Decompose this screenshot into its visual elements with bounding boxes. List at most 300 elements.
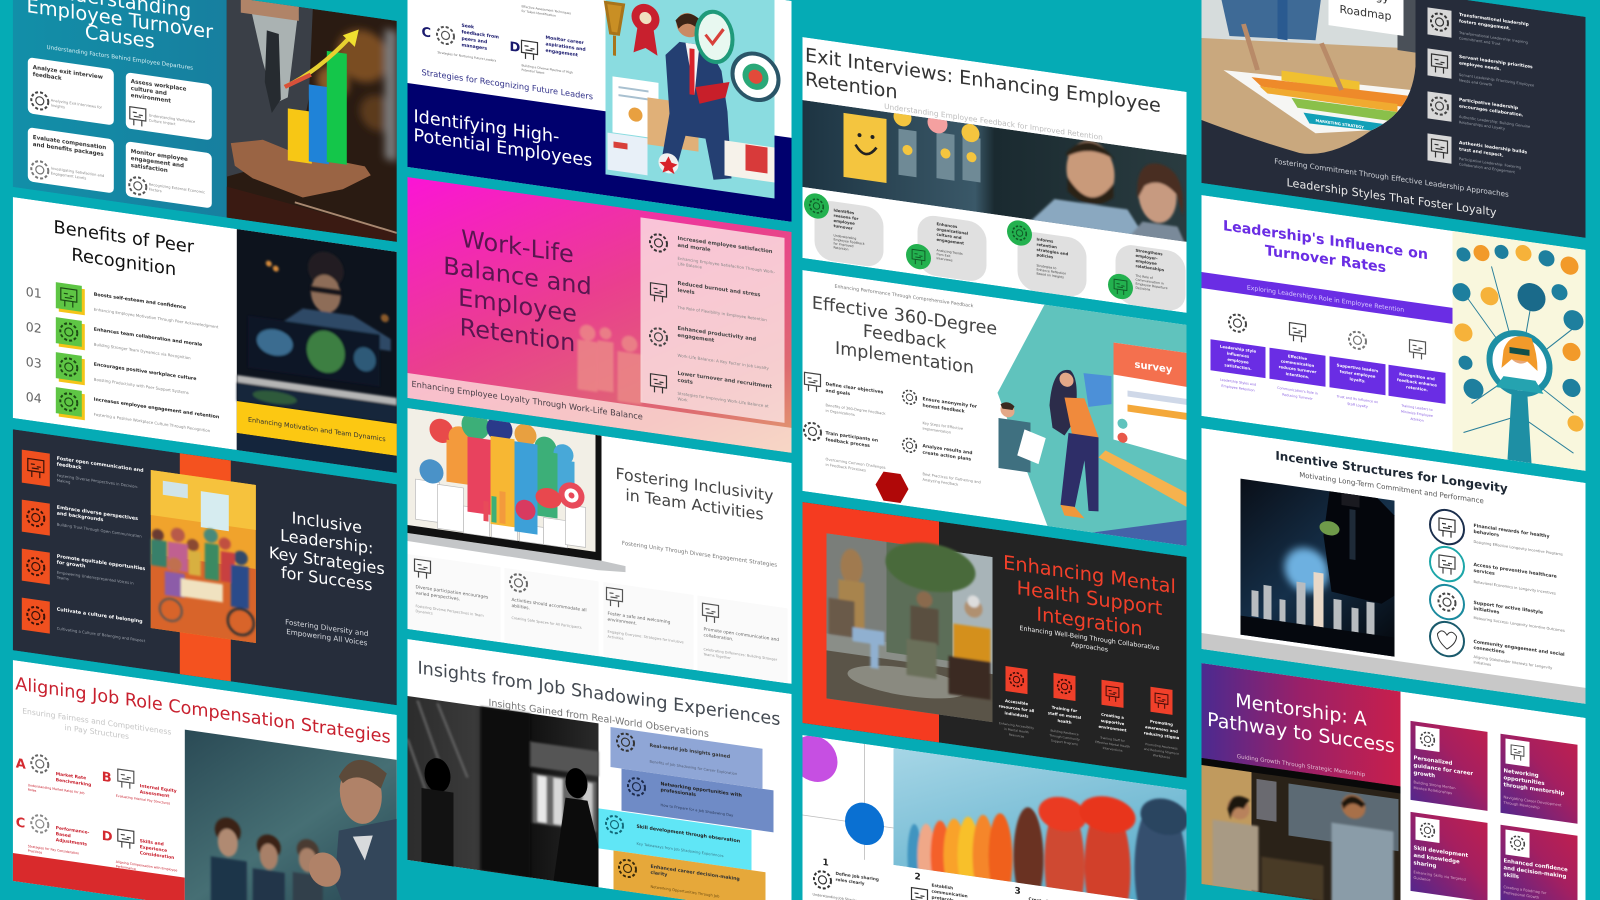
list item: analyze results: create action plans (922, 450, 971, 463)
slide: aligning job role compensation (13, 660, 397, 900)
slide subtitle: Motivating Long-Term Commitment and Performance (1299, 470, 1484, 505)
blob card 1: Understanding (833, 233, 856, 241)
list item 02: 02 (26, 319, 42, 336)
column 1: Dynamics (416, 609, 433, 616)
step 2: Establish (932, 882, 953, 891)
red hexagon (876, 470, 908, 504)
column 4: Celebrating Differences: Building Stronger (704, 647, 778, 662)
column 3: Staff Loyalty (1347, 402, 1368, 409)
slide title: Enhancing Mental (1003, 551, 1176, 598)
item C: Based (56, 831, 71, 839)
item D: Skills and (140, 838, 164, 848)
slide: incentive structures for longevity (1202, 428, 1586, 704)
item D: Experience (140, 844, 167, 854)
item B: Evaluating Internal Pay Structures (116, 794, 170, 806)
list item 04: 04 (26, 389, 42, 406)
list item: diverse perspectives (22, 500, 142, 538)
column 3 (604, 582, 694, 670)
column 1: satisfaction. (1224, 362, 1252, 371)
list item: equitable opportunities: Empowering Underrepresented Voices in (57, 570, 134, 586)
column 2: Communication's Role in (1277, 386, 1318, 396)
slide title: Insights from Job Shadowing Experiences (418, 659, 780, 730)
slide title: Turnover Rates (1265, 243, 1386, 276)
step 2 (912, 872, 968, 900)
list item: financial rewards: Designing Effective Longevity Incentive Programs (1474, 540, 1563, 557)
card: personalized guidance: Personalized (1414, 755, 1453, 767)
column 1: in Mental Health (1004, 727, 1029, 734)
slide: leadership styles that foster loyalty (1202, 0, 1586, 238)
card: evaluate compensation: Engagement Levels (51, 171, 86, 181)
column 2: health (1058, 718, 1072, 725)
list item: diverse perspectives: Embrace diverse perspectives (57, 505, 138, 522)
list item 3: engagement (678, 333, 715, 344)
slide: identifying high-potential employees (408, 0, 792, 222)
column 4: and Reducing Stigma in (1144, 747, 1179, 756)
list item: preventive healthcare: Behavioral Economics in Longevity Incentives (1474, 580, 1556, 596)
card: assess workplace culture (126, 72, 212, 140)
list item: train participants (804, 422, 886, 475)
column 4: Minimize Employee (1401, 410, 1433, 418)
roadmap label: Roadmap (1339, 3, 1392, 23)
blob card 4: employer- (1136, 253, 1158, 261)
slide title: Mentorship: A (1235, 689, 1367, 731)
card: networking opportunities: Navigating Career Development (1504, 795, 1562, 808)
column 1: resources for all (999, 703, 1035, 713)
blob card 4: Strengthens (1136, 248, 1163, 257)
column 3: Interventions (1103, 746, 1123, 753)
list item: authentic: trust and respect. (1459, 146, 1504, 159)
column 3: supportive (1101, 718, 1125, 726)
list item: culture of belonging: Cultivating a Culture of Belonging and Respect (57, 626, 146, 643)
card: assess workplace culture: Assess workplace (131, 79, 187, 93)
blob card 2 (906, 212, 986, 283)
list item: community engagement: Community engagement and social (1474, 639, 1565, 658)
list item: servant: Servant leadership prioritizes (1459, 54, 1533, 70)
card: personalized guidance: Mentee Relationships (1414, 786, 1452, 795)
item C (422, 24, 499, 62)
item D: D (102, 829, 113, 845)
column 1: Accessible (1005, 698, 1028, 706)
slide title: in Team Activities (625, 485, 764, 524)
item D: engagement (546, 48, 579, 58)
list item: equitable opportunities (22, 548, 145, 585)
column 4: Attrition (1410, 417, 1424, 423)
card: evaluate compensation: and benefits packages (33, 142, 104, 158)
bar 4: career clarity (614, 850, 766, 900)
card: personalized guidance: guidance for career (1414, 763, 1473, 777)
list item 01 (26, 282, 218, 328)
slide: exit interviews (802, 37, 1186, 313)
item C: Practices (28, 849, 43, 855)
column 1: Diverse participation encourages (416, 584, 489, 601)
card: enhanced confidence: skills (1504, 872, 1519, 880)
column 4: Training Leaders to (1400, 403, 1433, 412)
item C: managers (461, 42, 487, 52)
column 3 (1095, 679, 1130, 754)
column 4: Workplaces (1153, 753, 1171, 760)
list item 1: and morale (678, 243, 711, 253)
card: networking opportunities: opportunities (1504, 775, 1545, 787)
bar 2: networking: professionals (660, 787, 696, 798)
list item 4: Work (678, 396, 688, 403)
item A (16, 754, 91, 794)
photo: smiley boards and smiling colleagues (802, 94, 1186, 247)
blob card 4: The Role of (1135, 273, 1154, 280)
card: assess workplace culture: culture and (131, 86, 167, 97)
list item: authentic: Authentic leadership builds (1459, 140, 1528, 156)
column 2: Activities should accommodate all (512, 597, 587, 614)
list item: community engagement: Aligning Stakeholder Interests for Longevity (1474, 655, 1553, 670)
list item: train participants: feedback process (825, 437, 870, 449)
column 3: environment (1099, 724, 1127, 733)
list item 03 (26, 352, 196, 394)
column 1: Leadership style (1220, 344, 1256, 354)
list item: participative: encourages collaboration. (1459, 103, 1524, 119)
list item: anonymity: Key Steps for Effective (922, 421, 964, 431)
list item: preventive healthcare: services (1474, 568, 1495, 577)
blob card 4: Employee Departure (1136, 282, 1168, 290)
item C: Performance- (56, 825, 89, 836)
column 3: foster employee (1340, 369, 1376, 379)
list item: active lifestyle (1430, 583, 1565, 636)
column 1: employee (1227, 357, 1249, 365)
list item 3: Enhanced productivity and (678, 326, 756, 343)
list item: anonymity: honest feedback (922, 403, 966, 415)
list item: analyze results: Analyze results and (922, 443, 972, 456)
column 2 (504, 568, 598, 656)
list item: preventive healthcare: Access to preventive healthcare (1474, 562, 1557, 580)
column 2 (1048, 672, 1082, 747)
blob card 3: Based on Insights (1036, 271, 1064, 279)
bar 2: networking (622, 769, 774, 832)
slide subtitle: Understanding Factors Behind Employee Departures (47, 45, 193, 72)
step 3 (1010, 886, 1089, 900)
slide title: Feedback (863, 322, 947, 354)
bar 3: skill development: Key Takeaways from Job Shadowing Experiences (636, 842, 724, 858)
list item: diverse perspectives: Building Trust Through Open Communication (57, 522, 142, 539)
card: enhanced confidence: Professional Growth (1504, 891, 1539, 900)
blob card 1: reasons for (833, 213, 858, 221)
column 1 (1210, 311, 1266, 394)
list item: open communication: Fostering Diverse Perspectives in Decision- (57, 473, 139, 489)
step 3: 3 (1014, 886, 1021, 897)
column 1: Resources (1009, 733, 1025, 739)
slide subtitle: Fostering Unity Through Diverse Engagement Strategies (622, 541, 777, 569)
card: personalized guidance: Building Strong Mentor- (1414, 780, 1457, 790)
blob card 3: retention (1036, 242, 1057, 250)
column 4: feedback enhance (1397, 377, 1437, 388)
list item 01: Enhancing Employee Motivation Through Peer Acknowledgment (94, 307, 219, 329)
list item: participative: Authentic Leadership: Building Genuine (1459, 115, 1531, 129)
purple circle (792, 732, 838, 785)
blob card 2: from Exit (936, 252, 951, 258)
subtitle: Understanding Employee Feedback for Improved Retention (884, 102, 1103, 142)
subtitle band: Enhancing Employee Loyalty Through Work-Life Balance (412, 379, 643, 422)
list item: train participants: in Feedback Processes (825, 463, 866, 473)
list item 3: Work-Life Balance: A Key Factor in Job Loyalty (678, 353, 770, 371)
slide title: Implementation (835, 339, 974, 378)
slide title: Retention (460, 313, 575, 357)
list item: analyze results: Best Practices for Gathering and (922, 472, 981, 484)
card: monitor employee engagement: Recognizing External Economic (149, 182, 205, 194)
list item: authentic (1428, 133, 1528, 176)
column 3: Supportive leaders (1337, 362, 1379, 373)
slide: leadership's influence on turnover (1202, 195, 1586, 471)
item C: feedback from (461, 29, 499, 41)
column 2: Effective (1288, 353, 1307, 361)
subtitle band (408, 373, 792, 453)
slide title: Effective 360-Degree (812, 293, 997, 340)
list item: authentic: Collaboration and Engagement (1459, 162, 1515, 174)
slide title: Leadership: (280, 526, 373, 558)
item D: Consideration (140, 850, 174, 861)
list item: active lifestyle: Support for active lifestyle (1474, 600, 1543, 616)
column 4: Promoting (1150, 719, 1173, 727)
column 2: Training for (1052, 705, 1077, 713)
card: skill development: Enhancing Skills via Targeted (1414, 870, 1466, 882)
step 1: Define job sharing (836, 871, 879, 882)
column 4: reducing stigma (1144, 730, 1180, 740)
card: enhanced confidence: Creating a Roadmap for (1504, 885, 1547, 895)
slide title: Causes (85, 20, 155, 53)
list item 2: levels (678, 288, 695, 296)
item D: Monitor career (546, 35, 585, 46)
column 4 (698, 595, 788, 683)
slide subtitle: in Pay Structures (65, 723, 129, 741)
item D: Aligning Compensation with Employee (116, 860, 177, 873)
illustration: man reading with clock (606, 0, 778, 199)
blob card 3: Informs (1036, 236, 1054, 244)
bar 4: career clarity: Networking Opportunities Through Job (650, 885, 720, 899)
card: skill development: Guidance (1414, 876, 1431, 882)
card: analyze exit interview: Analyze exit interview (33, 65, 103, 81)
slide title: Exit Interviews: Enhancing Employee (805, 43, 1161, 117)
list item: transformational (1428, 7, 1529, 50)
slide title: Benefits of Peer (54, 217, 195, 258)
card: personalized guidance: growth (1414, 770, 1435, 779)
column 1: individuals (1005, 710, 1029, 719)
photo: hand holding bar chart (227, 0, 397, 242)
item B supporting text: Effective Assessment Techniques (522, 4, 571, 15)
list item: anonymity (903, 390, 978, 439)
item C: C (422, 25, 431, 41)
list item 03: 03 (26, 354, 42, 371)
slide: fostering inclusivity (408, 402, 792, 684)
list item: active lifestyle: Measuring Success: Longevity Incentive Outcomes (1474, 616, 1565, 633)
step 2: 2 (914, 872, 921, 883)
illustration: woman with survey board: survey (1134, 360, 1173, 376)
column 4: Recognition and (1399, 371, 1435, 381)
list item 1: Life Balance (678, 261, 702, 270)
item A: Roles (28, 788, 37, 793)
list item: transformational: Commitment and Trust (1459, 36, 1501, 46)
column 2: communication (1281, 358, 1314, 368)
list item: participative (1428, 91, 1531, 135)
list item: servant: Servant Leadership: Prioritizing Employee (1459, 73, 1535, 88)
card: analyze exit interview: Insights (51, 103, 65, 109)
bar 4: career clarity: clarity (650, 870, 667, 878)
blob card 1: turnover (833, 223, 853, 231)
list item 1: Enhancing Employee Satisfaction Through Work- (678, 256, 775, 275)
slide subtitle: Guiding Growth Through Strategic Mentorship (1237, 754, 1366, 778)
slide title: Leadership Styles That Foster Loyalty (1287, 176, 1497, 219)
column 1: Fostering Diverse Perspectives in Team (416, 604, 484, 618)
list item 04 (26, 387, 219, 432)
bar 2: networking: Networking opportunities with (660, 781, 742, 799)
list item 02 (26, 317, 202, 360)
list item 01: Boosts self-esteem and confidence (94, 292, 186, 311)
list item 04: Fostering a Positive Workplace Culture Through Recognition (94, 412, 211, 433)
purple subtitle band (1202, 272, 1452, 324)
list item: community engagement (1430, 620, 1565, 677)
column 2: intentions. (1286, 371, 1310, 379)
list item: train participants: Train participants on (825, 430, 878, 444)
card: analyze exit interview: Analyzing Exit Interviews for (51, 98, 103, 110)
item B: B (102, 770, 112, 786)
blob card 4: employee (1136, 258, 1157, 266)
column 1 (408, 554, 500, 642)
slide: insights from job shadowing (408, 639, 792, 900)
slide: understanding employee turnover causes (13, 0, 397, 242)
list item: equitable opportunities: for growth (57, 560, 86, 570)
column 2: staff on mental (1048, 710, 1082, 720)
list item: financial rewards (1430, 508, 1563, 561)
list item: community engagement: connections (1474, 645, 1505, 655)
blob card 1: Employee Feedback (833, 237, 865, 246)
list item: open communication: Making (57, 478, 71, 485)
list item: equitable opportunities: Promote equitable opportunities (57, 554, 145, 572)
column 3: environment. (608, 617, 637, 627)
card: networking opportunities: Through Mentorship (1503, 801, 1540, 810)
card: assess workplace culture: environment (131, 93, 171, 105)
item A: Benchmarking (56, 777, 91, 788)
bar 1: real-world insights (610, 727, 762, 789)
card: networking opportunities: through mentorship (1504, 782, 1564, 797)
list item: diverse perspectives: and backgrounds (57, 511, 104, 523)
card: networking opportunities: Networking (1504, 768, 1539, 779)
item D (102, 828, 178, 872)
list item: participative: Relationships and Loyalty (1459, 120, 1506, 131)
list item 03: Encourages positive workplace culture (94, 362, 196, 382)
slide: work-life balance (408, 177, 792, 453)
list item: anonymity: Ensure anonymity for (922, 396, 978, 410)
list item 03: Boosting Productivity with Peer Support Systems (94, 377, 189, 395)
column 2: reduces turnover (1279, 364, 1316, 374)
list item: culture of belonging: Cultivate a culture of belonging (57, 607, 143, 625)
card: monitor employee engagement (126, 141, 212, 208)
slide subtitle: Insights Gained from Real-World Observations (488, 698, 709, 740)
list item: culture of belonging (22, 598, 146, 647)
list item: train participants: Overcoming Common Challenges (825, 457, 886, 470)
list item 2: The Role of Flexibility in Employee Retention (677, 304, 767, 322)
slide title: Work-Life (461, 225, 574, 269)
card: skill development: and knowledge (1414, 853, 1460, 865)
card: evaluate compensation: Evaluate compensation (33, 135, 106, 151)
blob card 4: Decisions (1136, 286, 1151, 292)
column 1 (999, 665, 1035, 740)
photo: row of colorful heads (894, 748, 1188, 900)
item D: Building a Diverse Pipeline of High (522, 63, 573, 75)
column 1: influences (1227, 351, 1250, 359)
list item: open communication: feedback (57, 462, 82, 471)
list item: transformational: Transformational Leadership: Inspiring (1458, 31, 1528, 45)
column 2: Creating Safe Spaces for All Participants (512, 616, 582, 630)
purple subtitle band: Exploring Leadership's Role in Employee Retention (1247, 285, 1404, 314)
card: assess workplace culture: Culture Impact (149, 118, 176, 126)
blob card 3: Strategies to (1036, 263, 1056, 270)
list item 1 (650, 232, 775, 280)
blob card 3: strategies and (1036, 247, 1068, 256)
card: enhanced confidence: Enhanced confidence (1504, 858, 1568, 873)
card: monitor employee engagement: satisfaction (131, 163, 168, 174)
item D: D (510, 40, 520, 56)
item B (102, 767, 177, 806)
blob card 1: for Improved (833, 241, 853, 248)
list item 4: Strategies for Improving Work-Life Balance at (678, 391, 769, 409)
slide title: for Success (281, 563, 373, 595)
list item 01: 01 (26, 284, 42, 301)
slide subtitle: Approaches (1071, 641, 1108, 654)
list item: preventive healthcare (1430, 545, 1557, 597)
column 3: Trust and Its Influence on (1336, 394, 1378, 404)
step 2: communication (932, 888, 968, 899)
list item 4: Lower turnover and recruitment (678, 371, 772, 390)
column 2: Support Programs (1051, 739, 1078, 746)
slide title: Employee (458, 283, 577, 328)
column 3: Activities (608, 635, 624, 641)
card: assess workplace culture: Understanding Workplace (149, 113, 196, 124)
item A: Market Rate (56, 771, 86, 781)
list item 2 (650, 277, 767, 322)
list item 02: Building Stronger Team Dynamics via Recognition (94, 342, 191, 360)
slide title: Pathway to Success (1207, 708, 1395, 758)
slide title: Integration (1036, 603, 1143, 641)
column 1: Employee Retention (1221, 384, 1255, 393)
slide subtitle: Enhancing Well-Being Through Collaborative (1019, 625, 1160, 652)
slide title: Balance and (443, 252, 592, 301)
column 4: collaboration. (704, 632, 733, 643)
column 2: Reducing Turnover (1282, 393, 1313, 401)
list item: financial rewards: behaviors (1474, 529, 1499, 539)
card: networking opportunities (1500, 734, 1578, 824)
slide title: Inclusive (292, 508, 362, 537)
list item: open communication: Foster open communication and (57, 456, 144, 474)
bar 1: real-world insights: Benefits of Job Shadowing for Career Exploration (650, 760, 737, 776)
red footer band (13, 853, 185, 900)
slide title: Leadership's Influence on (1223, 218, 1428, 263)
slide title: Potential Employees (413, 126, 592, 171)
list item 4 (650, 367, 772, 415)
slide: job sharing with sculpted heads (792, 732, 1188, 900)
illustration: laptop with people (408, 402, 626, 574)
slide title: Retention (805, 67, 898, 104)
item A: A (16, 756, 27, 773)
translucent list panel (640, 217, 784, 423)
item D (510, 36, 586, 74)
card: evaluate compensation: Investigating Satisfaction and (51, 166, 104, 178)
blob card 1: Identifies (833, 207, 855, 215)
item D: Performance (116, 864, 136, 871)
blob card 2: organizational (936, 226, 969, 236)
blob card 4: relationships (1136, 263, 1165, 272)
blue circle with guide lines (802, 735, 894, 864)
list item: analyze results: Analyzing Feedback (922, 478, 959, 487)
photo: support group (826, 528, 992, 722)
list item 02: Enhances team collaboration and morale (94, 327, 202, 348)
blob card 4: Communication in (1136, 278, 1164, 286)
blob card 3 (1007, 219, 1086, 299)
bar 2: networking: How to Prepare for a Job Shadowing Day (660, 803, 734, 818)
